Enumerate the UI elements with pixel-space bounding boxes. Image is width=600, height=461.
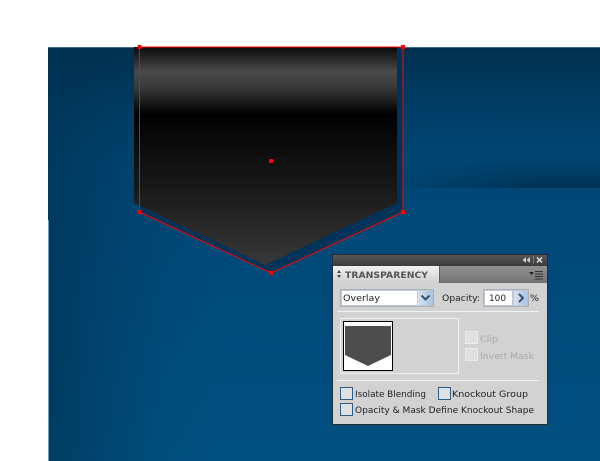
disabled options: clip and invert mask [466,332,535,362]
disabled options: clip and invert mask: Clip [480,335,498,345]
opacity field [442,290,539,306]
checkbox options: Isolate Blending [355,390,426,400]
opacity mask preview [340,318,458,374]
selection outline with anchor points [138,45,405,275]
panel: transparency [332,254,548,424]
blend mode dropdown [340,290,434,306]
dark ribbon shape [134,47,397,265]
panel tab row [333,266,547,283]
disabled options: clip and invert mask: Invert Mask [480,352,535,362]
opacity field: 100 [489,294,506,304]
opacity field: % [530,294,539,304]
blend mode dropdown: Overlay [343,294,381,304]
checkbox options: Knockout Group [452,390,528,400]
opacity field: Opacity: [442,294,480,304]
panel tab row: TRANSPARENCY [345,271,428,281]
ribbon drop shadow shape [140,47,403,273]
checkbox options [340,388,534,416]
checkbox options: Opacity & Mask Define Knockout Shape [355,406,534,416]
panel title bar [333,255,547,266]
